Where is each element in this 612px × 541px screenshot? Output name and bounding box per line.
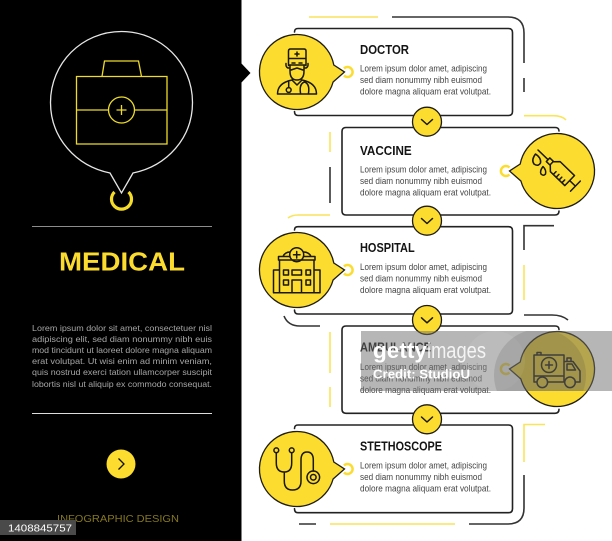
text block <box>360 262 491 295</box>
panel: doctor <box>259 28 512 116</box>
icon: ambulance <box>501 331 595 406</box>
watermark: getty images band <box>361 331 612 391</box>
text block: dolore magna aliquam erat volutpat. <box>360 385 491 395</box>
text block: sed diam nonummy nibh euismod <box>360 75 482 85</box>
panel: hospital <box>259 227 512 314</box>
text block: intro paragraph: quis nostrud exerci tation ullamcorper suscipit <box>32 367 213 377</box>
icon: chevron connector 2 <box>412 206 442 235</box>
text block: Lorem ipsum dolor amet, adipiscing <box>360 262 487 272</box>
panel: vaccine <box>342 128 595 215</box>
footer label: INFOGRAPHIC DESIGN <box>57 513 179 525</box>
icon: chevron connector 3 <box>412 306 442 334</box>
watermark: getty images band: images <box>427 338 486 363</box>
icon: chevron connector 4 <box>412 405 442 434</box>
heading: DOCTOR <box>360 42 410 57</box>
text block: Lorem ipsum dolor amet, adipiscing <box>360 362 487 372</box>
text block: sed diam nonummy nibh euismod <box>360 472 482 482</box>
text block: intro paragraph: adipiscing elit, sed diam nonummy nibh euis <box>32 334 212 344</box>
text block: dolore magna aliquam erat volutpat. <box>360 484 491 494</box>
text block: dolore magna aliquam erat volutpat. <box>360 188 491 198</box>
icon: syringe <box>501 133 595 208</box>
text block <box>360 164 491 198</box>
icon: stethoscope <box>259 431 353 506</box>
text block: intro paragraph: erat volutpat. Ut wisi enim ad minim veniam, <box>32 356 212 366</box>
text block: sed diam nonummy nibh euismod <box>360 374 482 384</box>
decorative route lines <box>284 17 568 524</box>
panel: stethoscope <box>259 425 512 513</box>
text block: Lorem ipsum dolor amet, adipiscing <box>360 460 487 470</box>
icon: medical briefcase bubble <box>50 32 192 209</box>
text block: sed diam nonummy nibh euismod <box>360 176 482 186</box>
watermark: image id <box>0 520 76 535</box>
text block: Lorem ipsum dolor amet, adipiscing <box>360 164 487 174</box>
heading: STETHOSCOPE <box>360 438 442 454</box>
icon: hospital <box>259 232 353 307</box>
watermark: getty images band: getty <box>373 338 427 363</box>
text block: intro paragraph: Lorem ipsum dolor sit amet, consectetuer nisl <box>32 323 212 333</box>
text block: intro paragraph <box>32 323 213 389</box>
icon: next arrow button <box>106 450 136 478</box>
panel: left black sidebar <box>0 0 250 541</box>
text block: sed diam nonummy nibh euismod <box>360 274 482 284</box>
text block: dolore magna aliquam erat volutpat. <box>360 86 491 96</box>
heading: HOSPITAL <box>360 240 415 255</box>
title: MEDICAL <box>59 248 185 276</box>
watermark: image id: 1408845757 <box>8 522 72 534</box>
text block: intro paragraph: mod tincidunt ut laoreet dolore magna aliquam <box>32 345 212 355</box>
watermark: getty images band: Credit: StudioU <box>373 366 470 382</box>
text block: Lorem ipsum dolor amet, adipiscing <box>360 64 487 74</box>
heading: AMBULANCE <box>360 340 431 354</box>
text block <box>360 362 491 395</box>
text block: dolore magna aliquam erat volutpat. <box>360 285 491 295</box>
icon: chevron connector 1 <box>412 107 442 136</box>
text block <box>360 64 491 96</box>
panel: ambulance <box>342 326 595 413</box>
heading: VACCINE <box>360 143 412 158</box>
text block: intro paragraph: lobortis nisl ut aliquip ex commodo consequat. <box>32 379 212 389</box>
icon: doctor <box>259 34 353 109</box>
text block <box>360 460 491 494</box>
